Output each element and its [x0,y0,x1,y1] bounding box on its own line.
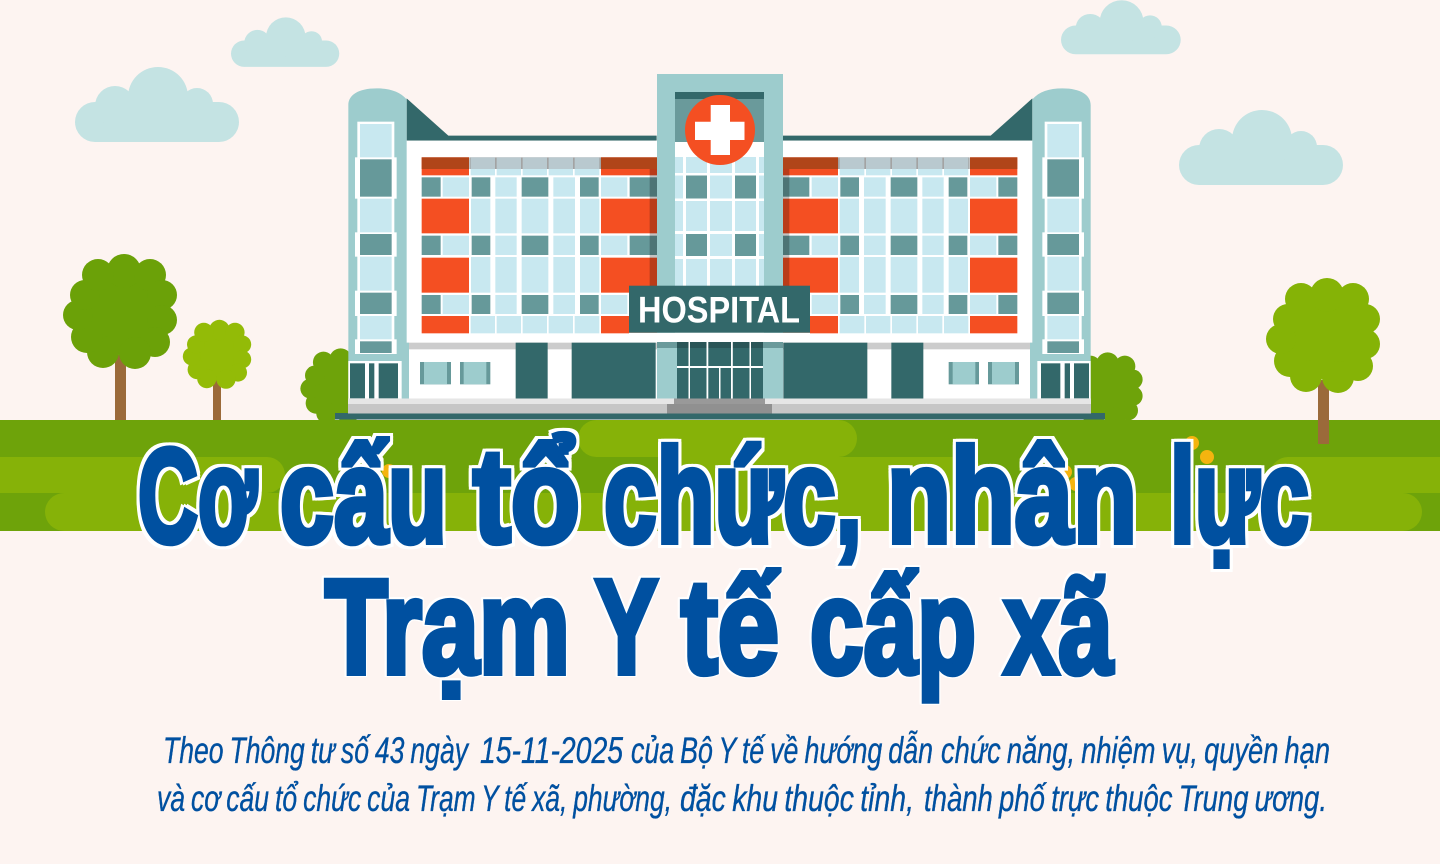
wing small ground windows [420,362,490,384]
title line 2: Trạm [325,553,570,702]
cloud: right large [1179,110,1343,185]
wing tower shadow [650,169,658,287]
bush: right of hospital [1067,352,1143,428]
tree: small left [183,320,251,421]
subtitle line 1 [163,730,1330,771]
wing light windows [443,169,627,333]
wing grey top windows [469,157,601,169]
flowers: yellow dots [371,436,1214,491]
cloud: upper right small [1061,0,1181,54]
title line 1: lực [1170,422,1309,571]
tower header [675,92,764,142]
title line 1: Cơ [138,422,257,571]
wing dark windows [422,177,658,314]
subtitle line 1: của Bộ Y tế về hướng dẫn [631,730,933,771]
left wing [348,88,659,399]
tower frame [657,74,783,398]
side tower windows [355,122,397,354]
title line 1: chức, [604,422,862,571]
HOSPITAL sign: HOSPITAL [638,290,800,330]
title line 1 [138,422,1309,571]
subtitle [157,730,1330,819]
subtitle line 2: và cơ cấu tổ chức của [157,778,410,819]
cloud: left large [75,67,239,142]
title line 2: cấp [810,553,976,702]
icon: red cross circle [685,95,755,165]
side tower [348,88,409,399]
title line 1: tổ [473,422,580,571]
side tower door [348,361,402,399]
tower windows [675,157,764,286]
title line 2: xã [1004,553,1113,702]
subtitle line 2: Trạm Y tế xã, phường, [416,778,672,819]
wing orange shade [422,157,658,169]
tree: right [1266,278,1380,444]
subtitle line 2: đặc khu thuộc tỉnh, [680,778,914,819]
title line 2 [325,553,1113,702]
title line 1: cấu [280,422,447,571]
tower facade [675,142,764,342]
wing orange panels [422,157,658,333]
central tower [629,74,810,398]
bush: left of hospital [300,348,376,424]
tree: large left [63,254,177,421]
wing white facade [406,141,659,343]
ground: green lawn bands [0,420,1440,531]
title line 1: nhân [887,422,1137,571]
hospital base platform [335,398,1105,420]
hospital building [335,74,1105,420]
subtitle line 1: Theo Thông tư số 43 ngày [163,730,470,771]
wing ground floor doors [516,343,656,399]
right wing (mirror of left wing) [780,88,1091,399]
title line 2: Y [595,553,658,702]
white band under sign [629,333,810,342]
subtitle line 1: 15-11-2025 [480,730,623,771]
cloud: upper left small [231,17,339,67]
wing roof [407,98,657,141]
entrance doors [657,342,783,398]
subtitle line 2 [157,778,1327,819]
title line 2: tế [681,553,779,702]
title [138,422,1309,702]
